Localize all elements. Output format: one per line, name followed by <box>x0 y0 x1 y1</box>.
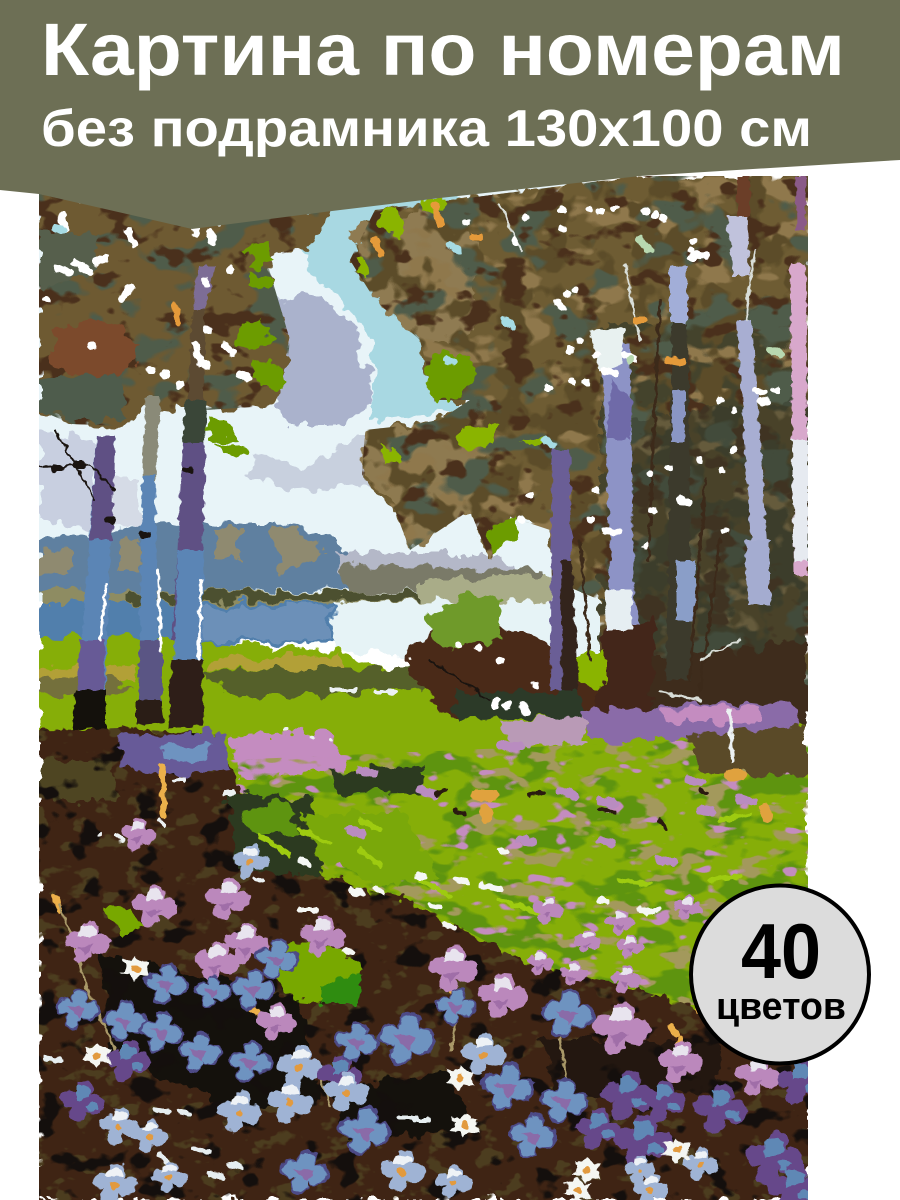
meadow base <box>39 635 808 1010</box>
left canopy <box>39 190 332 426</box>
painting: birch forest and lake <box>30 176 826 1200</box>
sky and clouds <box>39 180 604 603</box>
bright leaves <box>205 198 552 550</box>
badge: 40 colours: цветов <box>716 986 846 1028</box>
distant treeline and lake <box>39 522 610 660</box>
badge: 40 colours <box>691 886 869 1064</box>
title: Картина по номерам <box>41 8 845 91</box>
dabs and highlights <box>39 205 780 1177</box>
header banner <box>0 0 900 229</box>
subtitle: без подрамника 130х100 см <box>41 100 812 158</box>
meadow grass patches in soil <box>105 733 362 1003</box>
title <box>41 8 845 158</box>
badge: 40 colours: 40 <box>741 907 821 995</box>
right canopy <box>349 176 808 710</box>
shrub, forest floor and purple band <box>330 590 808 795</box>
foreground soil <box>39 728 808 1200</box>
green grass over soil <box>240 800 440 885</box>
flowers <box>55 818 826 1200</box>
birch trunks <box>72 176 808 730</box>
